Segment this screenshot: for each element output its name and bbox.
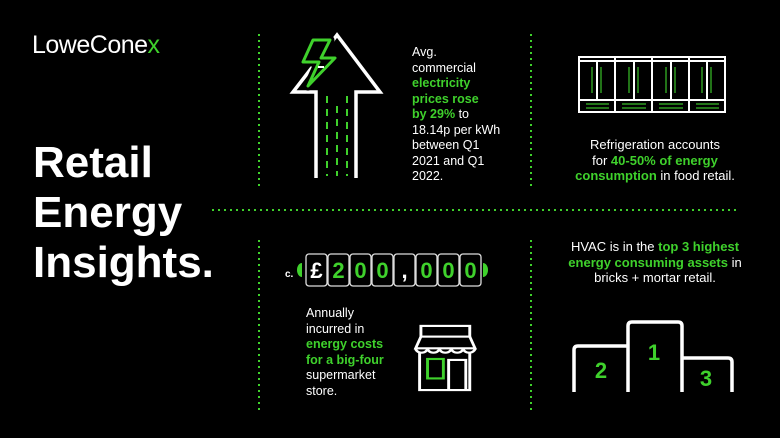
counter: £200,000: c. bbox=[285, 269, 293, 280]
text: annual costs: incurred in bbox=[306, 322, 364, 336]
text: refrigeration: consumption in food retail. bbox=[575, 168, 735, 183]
counter: £200,000: 2 bbox=[332, 258, 345, 283]
text: electricity prices: electricity bbox=[412, 76, 470, 90]
icon: podium: 3 bbox=[700, 366, 712, 391]
icon: podium bbox=[572, 320, 734, 392]
counter: £200,000: £ bbox=[310, 258, 323, 283]
icon: store bbox=[414, 324, 477, 392]
text: HVAC: energy consuming assets in bbox=[568, 254, 742, 270]
text: electricity prices bbox=[412, 45, 500, 183]
text: electricity prices: Avg. bbox=[412, 45, 437, 59]
icon: arrow with bolt bbox=[290, 32, 384, 178]
icon: podium: 1 bbox=[648, 340, 660, 365]
counter: £200,000: 0 bbox=[354, 258, 367, 283]
text: annual costs: Annually bbox=[306, 306, 354, 320]
title: Energy bbox=[33, 188, 182, 237]
text: electricity prices: between Q1 bbox=[412, 138, 479, 152]
title: Insights. bbox=[33, 238, 214, 287]
text: electricity prices: 2021 and Q1 bbox=[412, 154, 484, 168]
text: HVAC bbox=[568, 239, 742, 285]
title bbox=[33, 138, 214, 287]
text: electricity prices: by 29% to bbox=[412, 107, 469, 121]
text: electricity prices: 18.14p per kWh bbox=[412, 122, 500, 136]
logo: LoweConex bbox=[32, 31, 160, 59]
text: electricity prices: 2022. bbox=[412, 169, 443, 183]
title: Retail bbox=[33, 138, 153, 187]
text: refrigeration: Refrigeration accounts bbox=[590, 137, 720, 152]
icon: podium: 2 bbox=[595, 358, 607, 383]
text: HVAC: HVAC is in the top 3 highest bbox=[571, 239, 739, 254]
text: annual costs: for a big-four bbox=[306, 352, 384, 366]
icon: refrigerators bbox=[578, 56, 726, 113]
text: annual costs: energy costs bbox=[306, 337, 383, 351]
counter: £200,000: 0 bbox=[420, 258, 433, 283]
text: HVAC: bricks + mortar retail. bbox=[594, 270, 716, 285]
text: electricity prices: commercial bbox=[412, 60, 476, 74]
text: refrigeration: for 40-50% of energy bbox=[592, 152, 718, 168]
text: annual costs: store. bbox=[306, 384, 337, 398]
counter: £200,000: 0 bbox=[464, 258, 477, 283]
text: annual costs bbox=[306, 306, 384, 398]
counter: £200,000 bbox=[285, 253, 488, 287]
counter: £200,000: 0 bbox=[442, 258, 455, 283]
text: annual costs: supermarket bbox=[306, 368, 375, 382]
text: refrigeration bbox=[575, 137, 735, 183]
counter: £200,000: , bbox=[401, 258, 408, 283]
text: electricity prices: prices rose bbox=[412, 92, 479, 106]
counter: £200,000: 0 bbox=[376, 258, 389, 283]
